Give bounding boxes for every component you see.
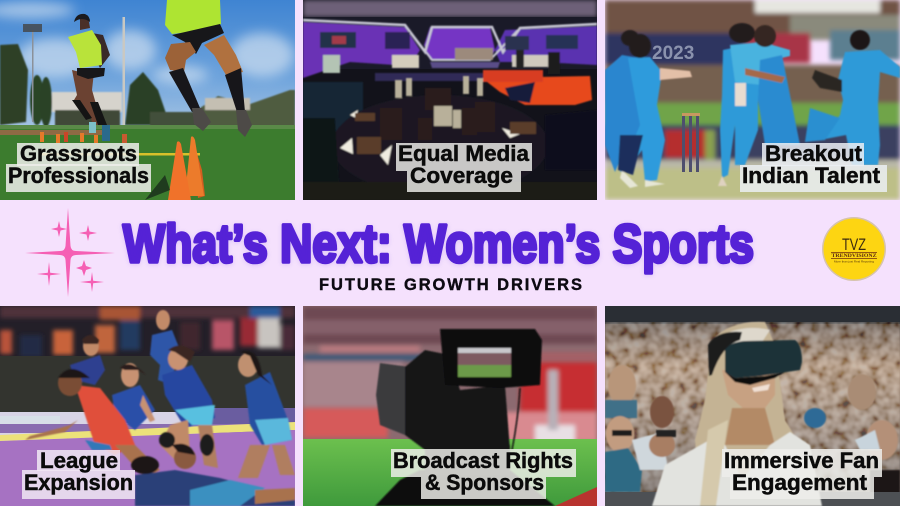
panel: Immersive Fan Engagement <box>605 306 900 506</box>
caption: Grassroots Professionals <box>6 141 151 192</box>
mid player <box>112 385 155 430</box>
icon: pink sparkles <box>25 208 115 297</box>
hurdles and cones <box>40 132 205 200</box>
caption: Broadcast Rights & Sponsors <box>391 448 576 499</box>
caption: Broadcast Rights & Sponsors: & Sponsors <box>425 470 544 495</box>
photo: footballers jumping over cones <box>0 0 295 200</box>
caption: Equal Media Coverage <box>396 141 532 192</box>
players: left pair <box>605 54 641 172</box>
banner: title strip <box>0 202 900 305</box>
caption: Equal Media Coverage: Equal Media <box>398 141 530 166</box>
caption: Immersive Fan Engagement: Immersive Fan <box>724 448 879 473</box>
panel: Equal Media Coverage <box>303 0 597 200</box>
caption: League Expansion: Expansion <box>24 470 133 495</box>
left player <box>68 14 110 141</box>
caption: Grassroots Professionals: Grassroots <box>20 141 137 166</box>
caption: Immersive Fan Engagement: Engagement <box>732 470 868 495</box>
subtitle: FUTURE GROWTH DRIVERS <box>319 276 582 294</box>
logo: TVZ Trendvisionz <box>822 217 886 281</box>
hair <box>694 320 793 470</box>
caption: League Expansion <box>22 448 135 499</box>
panel: Breakout Indian Talent <box>605 0 900 200</box>
camera body <box>376 363 410 435</box>
photo: Indian cricket team celebrating: 2023 <box>652 43 694 64</box>
panel: Broadcast Rights & Sponsors <box>303 306 597 506</box>
players: central hug <box>720 42 763 178</box>
standing players <box>150 330 178 385</box>
right player <box>165 0 252 137</box>
t-shirt <box>652 432 822 506</box>
caption: Broadcast Rights & Sponsors: Broadcast Rights <box>393 448 573 473</box>
players: right <box>820 50 900 165</box>
photo: fan wearing VR headset in crowd <box>605 306 900 506</box>
caption: Immersive Fan Engagement <box>722 448 882 499</box>
caption: Breakout Indian Talent: Indian Talent <box>742 163 881 188</box>
photo: broadcast camera in stadium <box>303 306 597 506</box>
raider in red <box>75 385 135 455</box>
title: What’s Next: Women’s Sports <box>123 214 754 274</box>
caption: Breakout Indian Talent <box>740 141 887 192</box>
caption: Breakout Indian Talent: Breakout <box>765 141 863 166</box>
players on floor <box>135 470 295 506</box>
face and neck <box>722 370 775 408</box>
panel: Grassroots Professionals <box>0 0 295 200</box>
panel: League Expansion <box>0 306 295 506</box>
caption: Grassroots Professionals: Professionals <box>8 163 149 188</box>
caption: League Expansion: League <box>40 448 118 473</box>
photo: kabaddi match <box>0 306 295 506</box>
logo: TVZ Trendvisionz: More than just Real Reporting <box>834 260 874 264</box>
logo: TVZ Trendvisionz: TRENDVISIONZ <box>832 253 877 259</box>
logo: TVZ Trendvisionz: TVZ <box>842 235 866 254</box>
caption: Equal Media Coverage: Coverage <box>410 163 513 188</box>
photo: TV studio set with round table <box>303 0 597 200</box>
VR headset <box>708 332 802 385</box>
photo: Indian cricket team celebrating <box>605 0 900 200</box>
